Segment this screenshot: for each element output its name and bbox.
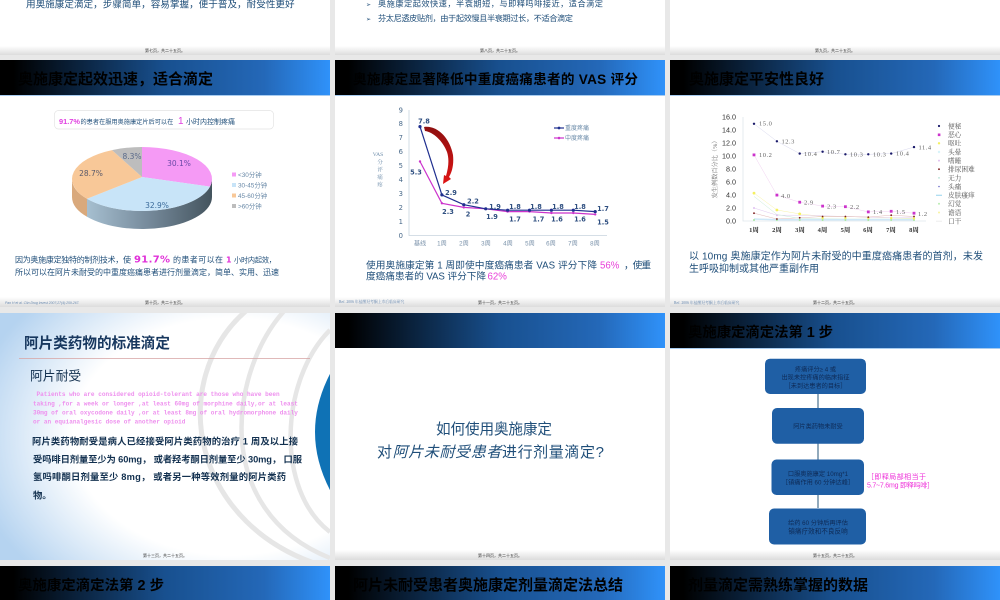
line chart: VAS score: 0 (399, 232, 403, 240)
header bar: slide 10 (0, 60, 330, 96)
panel: slide 14 question (335, 313, 665, 560)
reference note: slide 10: Pan H et al. Clin Drug Invest 2007;27(4):259-267. (5, 301, 80, 305)
line chart: adverse events: 4.0 (726, 190, 736, 200)
line chart: VAS score: 1.8 (530, 203, 542, 211)
text: slide 11 conclusion: 62% (488, 272, 507, 282)
legend: adverse events (936, 121, 975, 226)
line chart: VAS score: 2.2 (467, 198, 479, 206)
line chart: VAS score: 1 (399, 218, 403, 226)
line chart: adverse events: 10.4 (804, 151, 818, 158)
panel: slide 18 header: 剂量滴定需熟练掌握的数据 (688, 576, 868, 594)
flow box: pain score: 出现未控疼痛的临床指征 (781, 374, 850, 382)
text: Chinese definition (32, 436, 303, 500)
line chart: VAS score: 5周 (525, 240, 535, 248)
text: slide 10 conclusion: 1 (226, 256, 232, 264)
line chart: VAS score: 1.7 (509, 216, 521, 224)
text: bullet list: 芬太尼透皮贴剂，由于起效慢且半衰期过长，不适合滴定 (378, 13, 573, 23)
flow box: pain score: ［未到达患者的目标］ (785, 382, 846, 390)
text: question: 如何使用奥施康定 (436, 421, 552, 438)
panel: slide 16 header (0, 566, 330, 600)
panel: slide 7 (0, 0, 330, 55)
line chart: adverse events: 5周 (841, 226, 850, 234)
legend: adverse events: 谵语 (948, 208, 962, 217)
legend: adverse events: 排尿困难 (948, 165, 975, 174)
flow box: re-evaluate (769, 508, 866, 544)
line chart: VAS score: 1.8 (509, 203, 521, 211)
text: slide 12 conclusion: 生呼吸抑制或其他严重副作用 (689, 262, 819, 275)
line chart: VAS score: 疼 (377, 180, 383, 188)
text: English definition: Patients who are considered opioid-tolerant are those who have been (36, 391, 280, 398)
text: question (377, 421, 604, 461)
panel: slide 17 header: 阿片未耐受患者奥施康定剂量滴定法总结 (353, 576, 623, 594)
footer: page 10: 第十页，共二十五页。 (145, 299, 185, 305)
arrow: curved red decline arrow (424, 127, 453, 184)
callout: 91.7%: 1 (178, 116, 184, 127)
legend: adverse events: 口干 (948, 218, 962, 226)
text: slide 11 conclusion: 度癌痛患者的 VAS 评分下降 (366, 270, 486, 282)
line chart: adverse events: 14.0 (722, 126, 736, 134)
line chart: VAS score: 7周 (568, 240, 578, 248)
footer: page 11: 第十一页，共二十五页。 (478, 299, 522, 305)
line chart: adverse events: 10.3 (873, 152, 886, 158)
decorative arcs and blue crescent (200, 310, 331, 568)
legend: adverse events: 嗜睡 (948, 156, 962, 165)
legend: VAS chart: 中度疼痛 (565, 134, 589, 142)
line chart: adverse events: 2.9 (804, 200, 814, 206)
legend: VAS chart (554, 124, 589, 142)
line chart: VAS score: 2 (399, 204, 403, 212)
line chart: adverse events: 16.0 (722, 112, 736, 122)
line chart: VAS score: 2.3 (442, 208, 454, 216)
panel: slide 12 safety (670, 60, 1000, 307)
line chart: VAS score: 2周 (459, 240, 469, 248)
flow box: oral dose: ［镇痛作用 60 分钟达峰］ (782, 478, 854, 486)
line chart: adverse events: 4.0 (781, 193, 791, 200)
line chart: adverse events: 6周 (863, 226, 873, 234)
pie chart: onset time (72, 147, 212, 229)
legend: pie chart: 30-45分钟 (238, 180, 267, 190)
callout: morphine equivalent (867, 472, 934, 490)
text: Chinese definition: 氢吗啡酮日剂量至少 8mg， 或者另一种等效剂量的阿片类药 (33, 471, 286, 482)
subheading: opioid tolerance: 阿片耐受 (30, 368, 81, 384)
header bar: slide 11: 奥施康定显著降低中重度癌痛患者的 VAS 评分 (353, 71, 638, 87)
footer: page 15: 第十五页，共二十五页。 (813, 552, 857, 558)
footer: page 13: 第十三页，共二十五页。 (143, 552, 187, 558)
reference note: slide 11: Ref. 2006 年盐酸羟考酮上市后临床研究 (339, 299, 404, 304)
legend: adverse events: 便秘 (948, 121, 962, 130)
panel: slide 18 header (670, 566, 1000, 600)
text: question: 对阿片未耐受患者进行剂量滴定? (377, 443, 604, 461)
heading: standard titration: 阿片类药物的标准滴定 (24, 334, 170, 352)
flow box: oral dose: 口服奥施康定 10mg*1 (788, 470, 849, 478)
line chart: adverse events: 发生例数百分比（%） (711, 138, 719, 198)
header bar: slide 10: 奥施康定起效迅速，适合滴定 (18, 70, 213, 88)
text: bullet list (366, 0, 603, 23)
line chart: VAS score: 4周 (503, 240, 513, 248)
line chart: adverse events: 0.0 (726, 216, 736, 226)
line chart: adverse events: 3周 (795, 226, 805, 234)
legend: adverse events: 呕吐 (948, 139, 962, 148)
line chart: VAS score: 5 (399, 162, 403, 170)
header bar: slide 14 (335, 313, 665, 348)
line chart: adverse events: 12.0 (722, 138, 736, 148)
legend: adverse events: 皮肤瘙痒 (948, 191, 975, 200)
legend: pie chart: <30分钟 (238, 170, 262, 179)
callout: 91.7%: 小时内控制疼痛 (186, 117, 235, 126)
line chart: adverse events: 1周 (749, 226, 759, 234)
line chart: VAS score: 1.6 (551, 216, 563, 224)
line chart: VAS score: 1.6 (574, 216, 586, 224)
line chart: VAS score: 1.9 (486, 213, 498, 221)
text: Chinese definition: 物。 (33, 490, 52, 500)
line chart: adverse events: 10.2 (759, 152, 772, 159)
flow box: pain score: 疼痛评分≥ 4 或 (795, 366, 836, 374)
line chart: adverse events: 10.7 (827, 149, 841, 156)
panel: slide 9 (670, 0, 1000, 55)
line chart: VAS score: 痛 (377, 173, 383, 181)
text: slide 10 conclusion: 91.7% (134, 254, 170, 266)
text: slide 11 conclusion: 使用奥施康定第 1 周即使中度癌痛患者 VAS 评分下降 (366, 258, 597, 272)
legend: adverse events: 幻觉 (948, 199, 962, 208)
legend: adverse events: 无力 (948, 173, 962, 182)
text: Chinese definition: 受吗啡日剂量至少为 60mg， 或者羟考酮日剂量至少 30mg， 口服 (33, 454, 303, 464)
footer: page 12: 第十二页，共二十五页。 (813, 299, 857, 305)
line chart: adverse events: 2.3 (827, 204, 837, 210)
legend: adverse events: 恶心 (948, 130, 962, 139)
footer: page 9: 第九页，共二十五页。 (815, 47, 855, 53)
line chart: adverse events: 10.0 (722, 152, 736, 160)
line chart: VAS score: 7.8 (418, 118, 430, 126)
pie chart: onset time: 32.9% (145, 201, 169, 210)
line chart: adverse events: 1.2 (918, 211, 928, 218)
legend: adverse events: 头晕 (948, 147, 962, 156)
text: English definition: or an equianalgesic dose of another opioid (33, 419, 186, 426)
pie chart: onset time: 28.7% (79, 169, 103, 178)
line chart: VAS score: 1.7 (533, 216, 545, 224)
line chart: VAS score: 6周 (546, 240, 556, 248)
line chart: VAS score: 5.3 (410, 168, 422, 176)
header bar: slide 12: 奥施康定平安性良好 (689, 70, 824, 88)
line chart: adverse events: 2周 (772, 226, 782, 234)
text: slide 12 conclusion: 以 10mg 奥施康定作为阿片未耐受的中重度癌痛患者的首剂，未发 (689, 250, 983, 262)
line chart: adverse events: 4周 (818, 226, 827, 234)
text: slide 11 conclusion (366, 258, 651, 282)
header bar: slide 12 (670, 60, 1000, 96)
callout: 91.7%: 91.7% (59, 117, 80, 126)
line chart: VAS score: 基线 (414, 240, 426, 248)
text: bullet list: ➢ (366, 2, 371, 8)
footer: page 14: 第十四页，共二十五页。 (478, 552, 522, 558)
line chart: VAS score: 6 (399, 148, 403, 156)
line chart: VAS score: 2 (466, 210, 471, 218)
text: slide 10 conclusion: 的患者可以在 (173, 254, 223, 264)
line chart: VAS score: VAS (373, 152, 383, 158)
line chart: adverse events: 10.3 (850, 152, 863, 158)
reference note: slide 12: Ref. 2006 年盐酸羟考酮上市后临床研究 (674, 300, 739, 305)
flow box: pain score (765, 359, 866, 394)
panel: slide 8 (335, 0, 665, 55)
line chart: adverse events: 11.4 (918, 144, 932, 152)
text: slide 10 conclusion: 所以可以在阿片未耐受的中重度癌痛患者进行剂量滴定，简单、实用、迅速 (15, 267, 279, 277)
line chart: adverse events: 2.0 (726, 204, 736, 212)
legend: VAS chart: 重度疼痛 (565, 124, 589, 132)
line chart: VAS score: 1.7 (597, 205, 609, 213)
line chart: VAS score: 1.8 (552, 203, 564, 211)
line chart: VAS score: 评 (377, 166, 383, 174)
footer: page 8: 第八页，共二十五页。 (480, 47, 520, 53)
panel: slide 15 step 1 (670, 313, 1000, 560)
header bar: slide 11 (335, 60, 665, 96)
panel: slide 13 standard titration (0, 310, 331, 568)
flow box: oral dose (772, 460, 864, 495)
line chart: VAS score: 2.9 (445, 189, 457, 197)
line chart: adverse events: 8周 (909, 226, 919, 234)
text: slide 10 conclusion: 因为奥施康定独特的制剂技术，使 (15, 254, 131, 264)
flow box: opioid naive (772, 408, 864, 444)
flow box: re-evaluate: 镇痛疗效和不良反响 (788, 526, 848, 536)
line chart: adverse events: 7周 (886, 226, 896, 234)
panel: slide 17 header (335, 566, 665, 600)
line chart: adverse events: 12.3 (782, 138, 795, 146)
line chart: adverse events: 15.0 (759, 120, 772, 128)
text: slide 10 conclusion (15, 254, 279, 277)
line chart: adverse events: 6.0 (726, 178, 736, 186)
callout: morphine equivalent: ［即释局部相当于 (867, 472, 926, 481)
line chart: VAS score (373, 106, 609, 248)
text: English definition: taking ,for a week or longer ,at least 60mg of morphine daily,or at least (33, 401, 298, 408)
line chart: adverse events: 1.5 (896, 209, 906, 216)
panel: slide 10 onset (0, 60, 330, 307)
callout: 91.7%: 的患者在服用奥施康定片后可以在 (80, 118, 173, 126)
line chart: VAS score: 3周 (481, 240, 491, 248)
text: English definition: 30mg of oral oxycodone daily ,or at least 8mg of oral hydromorphone daily (33, 410, 298, 417)
line chart: VAS score: 8 (399, 120, 403, 128)
text: slide 12 conclusion (689, 250, 983, 275)
text: Chinese definition: 阿片类药物耐受是病人已经接受阿片类药物的治疗 1 周及以上接 (32, 436, 299, 446)
line chart: adverse events (711, 112, 932, 234)
line chart: VAS score: 分 (377, 158, 383, 166)
line chart: adverse events: 2.2 (850, 204, 860, 211)
line chart: adverse events: 10.4 (896, 150, 910, 158)
divider rule (19, 357, 310, 360)
line chart: VAS score: 1.9 (489, 203, 501, 211)
line chart: VAS score: 4 (399, 176, 403, 184)
panel: slide 16 header: 奥施康定滴定法第 2 步 (18, 576, 164, 594)
line chart: VAS score: 1.8 (574, 203, 586, 211)
connector lines: flowchart (817, 394, 819, 508)
flow box: opioid naive: 阿片类药物未耐受 (793, 422, 843, 430)
text: bullet list: ➢ (366, 17, 371, 23)
callout: morphine equivalent: 5.7~7.6mg 即释吗啡］ (867, 480, 934, 490)
text: slide 11 conclusion: ，使重 (624, 258, 651, 272)
footer: page 7: 第七页，共二十五页。 (145, 47, 185, 53)
legend: pie chart (232, 170, 267, 210)
pie chart: onset time: 8.3% (122, 152, 142, 161)
legend: pie chart: 45-60分钟 (238, 191, 267, 200)
text: English definition (33, 391, 298, 426)
line chart: VAS score: 1周 (437, 240, 447, 248)
flow box: re-evaluate: 给药 60 分钟后再评估 (788, 519, 848, 527)
header bar: slide 15 (670, 313, 1000, 349)
line chart: VAS score: 8周 (590, 240, 600, 248)
line chart: VAS score: 7 (399, 134, 403, 142)
header bar: slide 15: 奥施康定滴定法第 1 步 (688, 323, 833, 341)
legend: adverse events: 头痛 (948, 182, 962, 191)
line chart: VAS score: 1.5 (597, 218, 609, 226)
line chart: adverse events: 1.4 (873, 209, 883, 216)
line chart: adverse events: 8.0 (726, 164, 736, 174)
legend: pie chart: >60分钟 (238, 202, 262, 210)
text: slide 10 conclusion: 小时内起效， (234, 256, 276, 264)
panel: slide 11 VAS (335, 60, 665, 307)
line chart: VAS score: 9 (399, 106, 403, 114)
pie chart: onset time: 30.1% (167, 159, 191, 168)
text: slide 11 conclusion: 56% (600, 260, 620, 272)
callout: 91.7% (54, 110, 274, 129)
line chart: VAS score: 3 (399, 190, 403, 198)
